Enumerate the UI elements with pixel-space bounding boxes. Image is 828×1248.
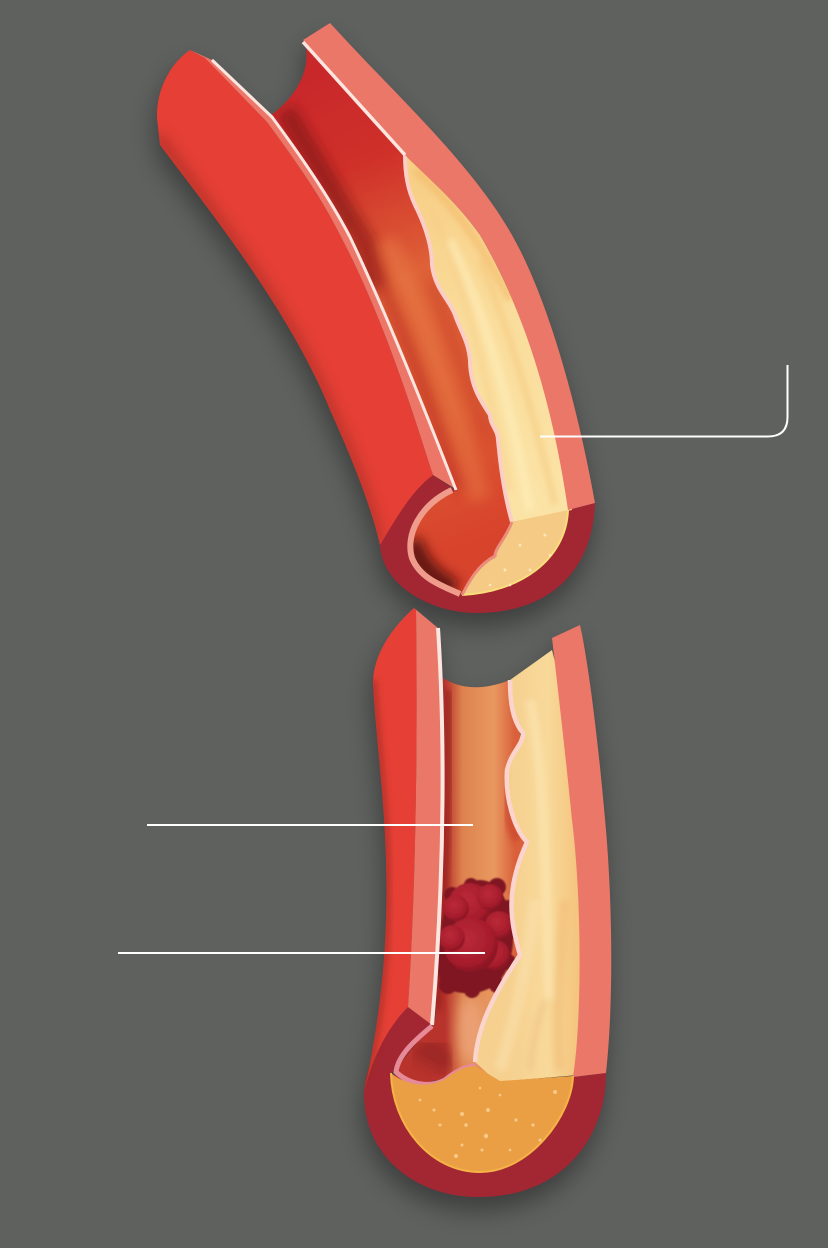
shadow: upper artery [155,37,593,627]
plaque cross-section [462,510,568,595]
cut wall strip [190,50,457,490]
callout line: plaque [540,365,788,436]
cut wall strip [408,608,443,1025]
inner lining at the cut [410,490,460,594]
inner lining at the cut [396,1026,476,1084]
plaque [405,155,572,522]
plaque cross-section [391,1066,573,1172]
white lining far [303,42,405,155]
white lining [212,60,456,490]
far wall salmon [552,625,611,1077]
artery: lower, with plaque and clot [364,608,611,1197]
outer wall body [364,608,417,1093]
inner lumen [272,48,526,594]
illustration: two artery cross-sections [118,23,788,1219]
cut wall ring [380,475,595,613]
white lining [432,628,443,1025]
cut wall ring [364,1007,606,1197]
artery: upper, narrowed by plaque [157,23,595,613]
callout line: blood clot [118,952,485,954]
blood clot [433,878,519,998]
plaque [475,650,590,1082]
inner lumen [398,678,524,1082]
callout line: narrowed channel [147,824,473,826]
far wall salmon [303,23,595,510]
shadow: lower artery [362,622,608,1211]
outer wall body [157,50,433,545]
